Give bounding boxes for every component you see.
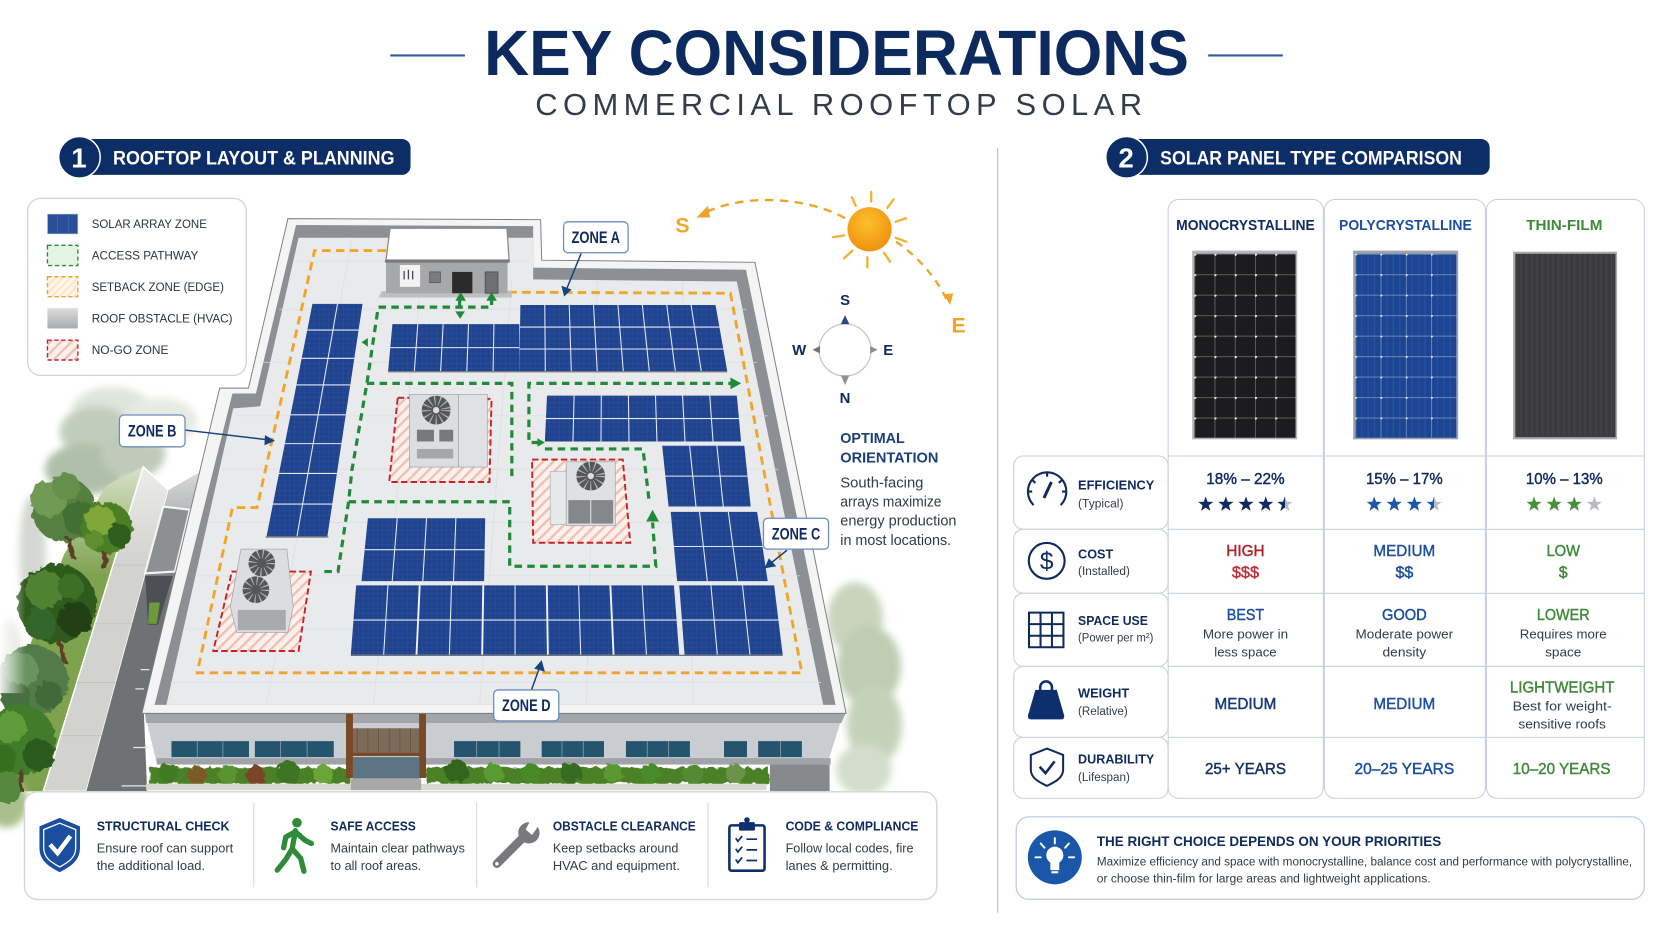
row: durability [1031, 749, 1610, 786]
compass: S [840, 292, 850, 309]
sidewalk [43, 467, 168, 791]
row: weight: MEDIUM [1215, 696, 1276, 713]
icon: dollar: $ [1040, 548, 1054, 575]
optimal orientation text: ORIENTATION [840, 449, 938, 466]
table columns [1168, 199, 1644, 798]
row: space use: Moderate power [1356, 626, 1454, 641]
text: structural check [97, 819, 234, 873]
text: safe access [331, 819, 465, 873]
row: space use: less space [1214, 645, 1277, 660]
section header 1: ROOFTOP LAYOUT & PLANNING [113, 149, 395, 170]
row: weight [1028, 679, 1615, 731]
section header 2: SOLAR PANEL TYPE COMPARISON [1160, 149, 1462, 170]
icon: shield check [39, 818, 80, 872]
row: space use: SPACE USE [1078, 613, 1148, 628]
stars: thin-film [1526, 496, 1602, 511]
compass: N [840, 390, 850, 407]
canopy [145, 507, 190, 625]
callout: zone C: ZONE C [772, 525, 820, 544]
text: safe access: Maintain clear pathways [331, 841, 465, 856]
legend: solar array zone: SOLAR ARRAY ZONE [92, 218, 207, 231]
callout: zone D: ZONE D [502, 696, 550, 715]
column heading: thin-film: THIN-FILM [1526, 217, 1602, 234]
sun path arcs [704, 200, 845, 218]
legend: access pathway: ACCESS PATHWAY [92, 250, 199, 263]
grass [0, 467, 143, 791]
row: cost: MEDIUM [1373, 543, 1435, 560]
entrance canopy [346, 703, 426, 790]
text: code and compliance: Follow local codes, fire [786, 841, 914, 856]
pathway arrowheads [361, 292, 741, 521]
icon: clipboard [729, 817, 765, 871]
callout: zone B [119, 415, 275, 447]
array centre [361, 518, 485, 581]
stars: monocrystalline [1198, 496, 1293, 511]
row: space use: GOOD [1382, 607, 1427, 624]
comparison table [1014, 199, 1644, 798]
row: space use [1029, 607, 1607, 660]
title line left [390, 54, 465, 57]
row: space use: LOWER [1537, 607, 1590, 624]
row: weight: LIGHTWEIGHT [1510, 679, 1615, 696]
icon: dollar [1029, 543, 1065, 579]
legend: no-go zone: NO-GO ZONE [92, 344, 169, 357]
road [86, 469, 205, 791]
text: obstacle clearance: HVAC and equipment. [553, 858, 680, 873]
parapet lip [142, 219, 846, 713]
roof surface [166, 238, 823, 705]
stars: polycrystalline [1367, 496, 1442, 511]
panel image: thin-film [1513, 252, 1617, 439]
section header 1 [59, 136, 411, 178]
row: space use: density [1382, 645, 1427, 660]
row: cost: $$ [1395, 564, 1413, 581]
recommendation text: Maximize efficiency and space with monocrystalline, balance cost and performance with polycrystalline, [1097, 855, 1632, 869]
row: cost: (Installed) [1078, 565, 1130, 578]
row: space use: (Power per m²) [1078, 632, 1154, 645]
rooftop access penthouse [379, 228, 512, 298]
row: space use: BEST [1227, 607, 1264, 624]
parapet inner wall [155, 225, 836, 705]
text: obstacle clearance [553, 819, 696, 873]
legend: roof obstacle [47, 308, 233, 328]
row: efficiency: 15% – 17% [1366, 471, 1443, 488]
row: weight: MEDIUM [1373, 696, 1435, 713]
text: obstacle clearance: OBSTACLE CLEARANCE [553, 819, 696, 834]
row: efficiency [1028, 471, 1603, 511]
text: code and compliance [786, 819, 919, 873]
row: durability: 10–20 YEARS [1513, 761, 1610, 778]
callout: zone A [561, 222, 628, 296]
icon: grid [1029, 613, 1063, 647]
row: weight: sensitive roofs [1518, 716, 1606, 731]
sun and path [675, 192, 966, 338]
panel: recommendation [1016, 817, 1644, 899]
table row labels box [1014, 456, 1168, 798]
row: cost: HIGH [1226, 543, 1265, 560]
section divider [997, 148, 998, 913]
icon: gauge [1028, 472, 1066, 505]
callout: zone C [763, 518, 829, 568]
row: space use: More power in [1203, 626, 1288, 641]
landscape: trees, road and sidewalk [0, 387, 902, 827]
panel image: monocrystalline [1192, 251, 1297, 439]
optimal orientation text [840, 430, 956, 549]
setback zone path [197, 251, 802, 673]
legend: roof obstacle: ROOF OBSTACLE (HVAC) [92, 313, 233, 326]
row: efficiency: (Typical) [1078, 497, 1124, 510]
lower-left grass fade [0, 776, 28, 827]
no-go zone 2 with HVAC [532, 460, 630, 543]
row: cost [1029, 543, 1581, 581]
no-go zone 3 with HVAC [213, 549, 311, 651]
optimal orientation text: arrays maximize [840, 495, 942, 511]
optimal orientation text: energy production [840, 514, 956, 530]
array zone D [351, 585, 783, 655]
row: weight: (Relative) [1078, 705, 1128, 718]
hedge [149, 759, 770, 785]
sun and path: E [952, 314, 966, 338]
text: code and compliance: lanes & permitting. [786, 858, 893, 873]
text: structural check: STRUCTURAL CHECK [97, 819, 230, 834]
sun labels: S [675, 213, 690, 237]
compass: E [883, 342, 893, 359]
array zone A [388, 305, 727, 372]
legend: setback zone: SETBACK ZONE (EDGE) [92, 281, 224, 294]
recommendation text: or choose thin-film for large areas and lightweight applications. [1097, 871, 1431, 885]
callout: zone A: ZONE A [571, 228, 620, 247]
row: cost: $$$ [1232, 564, 1259, 581]
recommendation text [1097, 855, 1632, 885]
legend [28, 198, 246, 375]
text: code and compliance: CODE & COMPLIANCE [786, 819, 919, 834]
icon: shield outline [1031, 749, 1063, 786]
panel: planning checklist [25, 792, 937, 899]
right foliage [827, 582, 902, 795]
array zone C [662, 446, 768, 581]
text: safe access: to all roof areas. [331, 858, 421, 873]
recommendation heading: THE RIGHT CHOICE DEPENDS ON YOUR PRIORITIES [1097, 833, 1441, 849]
text: structural check: the additional load. [97, 858, 205, 873]
array middle [545, 396, 741, 441]
section header 2 [1106, 136, 1490, 178]
subtitle: COMMERCIAL ROOFTOP SOLAR [535, 87, 1142, 122]
facade [145, 713, 846, 765]
legend: solar array zone [47, 214, 207, 234]
column heading: polycrystalline: POLYCRYSTALLINE [1339, 217, 1472, 234]
row: space use: space [1545, 645, 1581, 660]
row: weight: Best for weight- [1513, 699, 1612, 714]
row: cost: COST [1078, 546, 1113, 561]
row: weight: WEIGHT [1078, 685, 1129, 700]
icon: walking person [277, 818, 311, 871]
callout: zone B: ZONE B [128, 422, 176, 441]
no-go zone 1 with HVAC [389, 395, 492, 482]
tree cluster [0, 472, 132, 803]
title line right [1208, 54, 1283, 57]
access pathways [321, 298, 736, 572]
column heading: monocrystalline: MONOCRYSTALLINE [1176, 217, 1315, 234]
optimal orientation text: South-facing [840, 475, 923, 491]
solar arrays [266, 304, 783, 655]
faded background trees [0, 387, 197, 704]
section header 2: 2 [1118, 142, 1134, 173]
row: cost: LOW [1546, 543, 1581, 560]
row: efficiency: 10% – 13% [1526, 471, 1603, 488]
optimal orientation text: in most locations. [840, 533, 951, 549]
left white fade [0, 448, 26, 693]
callout: zone D [494, 660, 559, 721]
legend: access pathway [47, 245, 199, 266]
row: space use: Requires more [1520, 626, 1607, 641]
panel image: polycrystalline [1353, 251, 1458, 439]
legend: no-go zone [47, 340, 169, 360]
row: efficiency: 18% – 22% [1206, 471, 1285, 488]
row: durability: 20–25 YEARS [1354, 761, 1454, 778]
icon: weight [1028, 681, 1064, 719]
array zone B [266, 304, 363, 537]
icon: wrench [495, 821, 542, 865]
compass [792, 292, 893, 407]
icon: light bulb [1028, 830, 1082, 884]
row: durability: (Lifespan) [1078, 771, 1130, 784]
legend: setback zone [47, 277, 224, 297]
title: KEY CONSIDERATIONS [484, 17, 1189, 89]
optimal orientation text: OPTIMAL [840, 430, 905, 447]
row: cost: $ [1559, 564, 1568, 581]
row: efficiency: EFFICIENCY [1078, 477, 1154, 492]
compass: W [792, 342, 807, 359]
row: durability: 25+ YEARS [1205, 761, 1286, 778]
text: safe access: SAFE ACCESS [331, 819, 416, 834]
building [142, 219, 846, 791]
section header 1: 1 [71, 142, 87, 173]
row: durability: DURABILITY [1078, 751, 1154, 766]
sun [847, 207, 892, 251]
text: obstacle clearance: Keep setbacks around [553, 841, 678, 856]
text: structural check: Ensure roof can support [97, 841, 234, 856]
